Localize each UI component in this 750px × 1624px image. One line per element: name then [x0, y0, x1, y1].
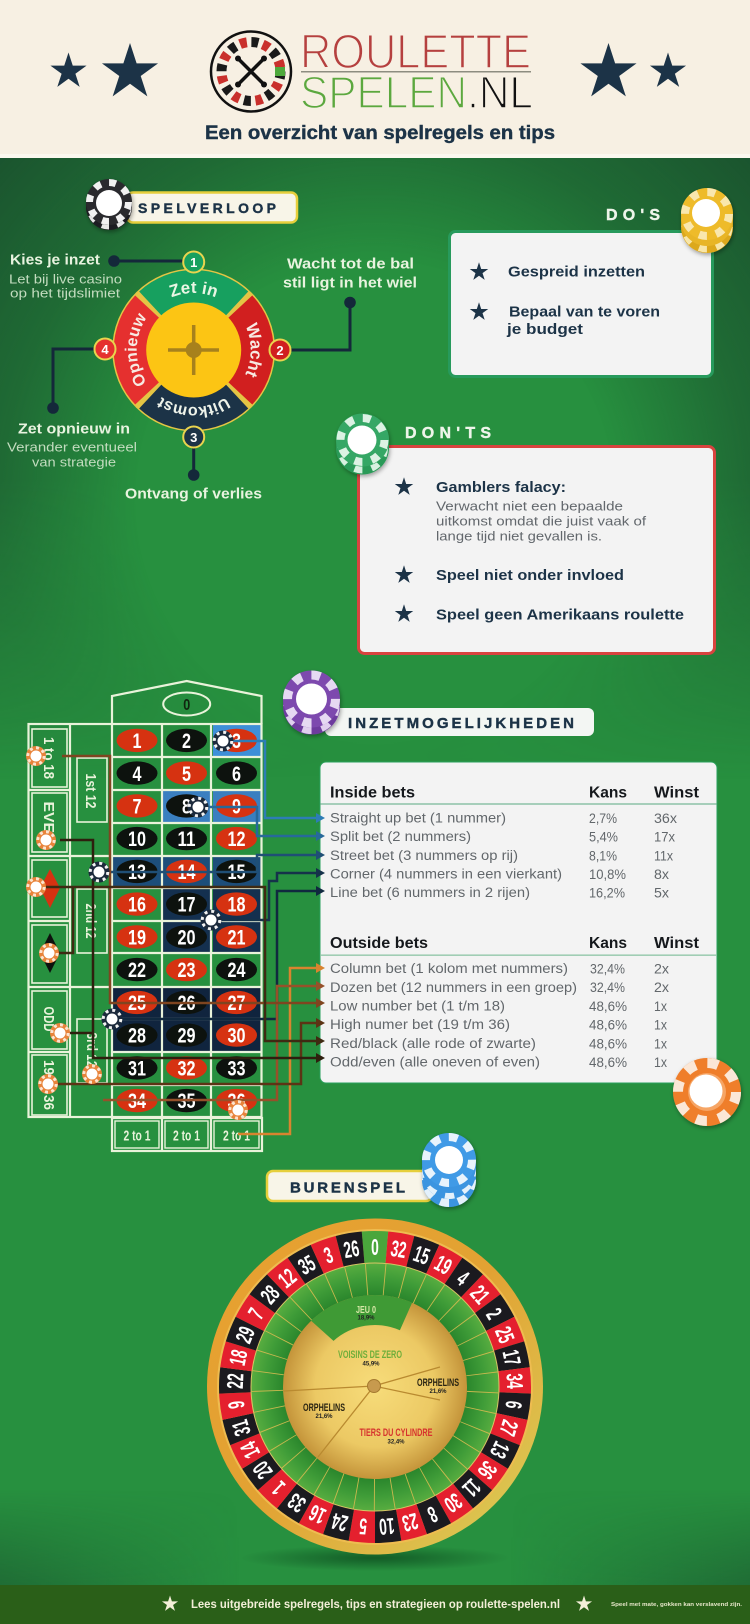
- zero section: 0: [183, 697, 190, 714]
- outside bets table: High numer bet (19 t/m 36): [330, 1017, 510, 1032]
- inside bets table: Kans: [589, 784, 627, 802]
- inside bets table: Split bet (2 nummers): [330, 829, 471, 844]
- number cells: 14: [178, 861, 196, 884]
- number cells: 10: [128, 828, 146, 851]
- chip: orange: [673, 1058, 741, 1126]
- inside bets table: Corner (4 nummers in een vierkant): [330, 866, 562, 882]
- number pockets: 17: [496, 1348, 525, 1368]
- item: bepaal budget: Bepaal van te voren: [509, 304, 660, 320]
- chip: dark: [86, 179, 132, 230]
- number pockets: 32: [389, 1236, 408, 1264]
- item: speel niet onder invloed: [395, 565, 624, 584]
- number cells: 1: [132, 730, 142, 753]
- outside bets table: 48,6%: [589, 1036, 627, 1052]
- number pockets: 30: [439, 1487, 466, 1517]
- number pockets: 35: [294, 1251, 321, 1281]
- number pockets: 25: [489, 1323, 518, 1347]
- don'ts card: [358, 446, 714, 654]
- table chips: orange: [26, 746, 248, 1120]
- number pockets: 9: [224, 1399, 251, 1410]
- chip: blue stack: [422, 1133, 476, 1207]
- number cells: 23: [178, 959, 196, 982]
- number cells: 24: [228, 959, 246, 982]
- number cells: 20: [178, 926, 196, 950]
- number cells: 28: [128, 1024, 146, 1048]
- number pockets: 27: [493, 1417, 522, 1439]
- text: kies je inzet: [9, 252, 122, 300]
- number pockets: 11: [457, 1473, 485, 1502]
- number cells: 25: [128, 992, 146, 1015]
- outside bet labels: 19 to 36: [40, 1060, 57, 1110]
- number cells: 21: [228, 926, 246, 950]
- section: burenspel: [207, 1133, 543, 1571]
- number pockets: 22: [223, 1373, 250, 1389]
- zero section: [112, 681, 262, 724]
- label: orphelins right: ORPHELINS: [417, 1377, 459, 1389]
- subtitle: Een overzicht van spelregels en tips: [205, 123, 555, 144]
- number cells: 17: [178, 894, 196, 916]
- number cells: 36: [228, 1090, 246, 1113]
- table card: [320, 762, 717, 1083]
- bet connector lines: [36, 741, 325, 1134]
- number pockets: 3: [321, 1243, 337, 1270]
- text: zet opnieuw in: [7, 420, 137, 470]
- panel: inzetmogelijkheden table: [320, 762, 717, 1083]
- 2 to 1 cells: 2 to 1: [173, 1128, 200, 1144]
- arrow: red black: [36, 887, 325, 1046]
- connector step 3: [188, 448, 200, 481]
- number pockets: 29: [232, 1323, 261, 1347]
- number cells: 33: [228, 1058, 246, 1080]
- number pockets: [219, 1231, 531, 1544]
- inside bets table: Inside bets: [330, 784, 415, 802]
- banner: inzetmogelijkheden: INZETMOGELIJKHEDEN: [348, 715, 574, 732]
- number pockets: 36: [472, 1456, 501, 1483]
- highlighted cells: [113, 725, 261, 1052]
- outside bets table: Column bet (1 kolom met nummers): [330, 961, 568, 976]
- logo text: roulette: ROULETTE: [300, 26, 531, 79]
- inside bets table: 2,7%: [589, 811, 617, 826]
- 2 to 1 cells: 2 to 1: [223, 1128, 250, 1144]
- number cells: 35: [178, 1090, 196, 1113]
- roulette betting table: [28, 681, 262, 1151]
- number pockets: 0: [371, 1236, 379, 1261]
- arrow: column: [238, 963, 325, 1134]
- item: gespreid inzetten: Gespreid inzetten: [508, 264, 645, 280]
- footer text: Lees uitgebreide spelregels, tips en strategieen op roulette-spelen.nl: [191, 1599, 560, 1611]
- logo text: spelen.nl: SPELEN.NL: [300, 67, 533, 118]
- number pockets: 13: [484, 1437, 514, 1462]
- number pockets: 19: [430, 1251, 456, 1281]
- section: spelverloop: [7, 179, 417, 502]
- roulette wheel: [207, 1218, 543, 1554]
- number pockets: 8: [423, 1500, 441, 1527]
- number badge 4: 4: [101, 342, 109, 357]
- inside bets table: 36x: [654, 811, 677, 826]
- label: jeu 0: JEU 0: [356, 1305, 376, 1316]
- text: kies je inzet: Kies je inzet: [10, 252, 100, 268]
- number cells: 11: [178, 828, 196, 851]
- gold rim: [207, 1218, 543, 1554]
- connector step 1: [108, 255, 183, 267]
- icon: red diamond: [40, 869, 60, 908]
- number pockets: 7: [244, 1304, 270, 1324]
- number pockets: 14: [236, 1437, 266, 1462]
- number cells: 9: [232, 796, 241, 818]
- number badge 1: 1: [190, 255, 197, 270]
- number cells: 3: [232, 730, 241, 753]
- label: orphelins left: [303, 1402, 345, 1420]
- connector step 4: [47, 349, 94, 414]
- star: header left large: [102, 43, 158, 96]
- number cells: 7: [132, 796, 142, 818]
- outside bet labels: ODD: [40, 1006, 57, 1032]
- outside bet boxes: [32, 729, 107, 1115]
- number badge 2: [270, 340, 290, 360]
- item: bepaal budget: [470, 302, 660, 338]
- text: kies je inzet: op het tijdslimiet: [10, 286, 120, 300]
- outside bet labels: 3rd 12: [83, 1032, 100, 1068]
- do's card: [450, 232, 712, 376]
- arrow: straight up: [223, 741, 325, 823]
- star: header right large: [580, 43, 637, 96]
- number pockets: 21: [464, 1281, 494, 1310]
- number pockets: 12: [274, 1264, 302, 1294]
- arrow: dozen: [103, 981, 325, 1100]
- label: jeu 0: 18,9%: [357, 1316, 375, 1322]
- number cells: 29: [178, 1024, 196, 1048]
- chip: purple: [283, 670, 340, 734]
- jeu 0 wedge: [311, 1295, 412, 1341]
- number cells: 19: [128, 926, 146, 950]
- heading: don'ts: DON'TS: [405, 425, 491, 442]
- banner: spelverloop: SPELVERLOOP: [138, 200, 276, 216]
- item: gamblers falacy: uitkomst omdat die juist vaak of: [436, 514, 646, 528]
- number badge 1: [183, 252, 204, 272]
- text: ontvang of verlies: Ontvang of verlies: [125, 486, 262, 502]
- outside bets table: 48,6%: [589, 1055, 627, 1070]
- inside bets table: 8x: [654, 867, 669, 882]
- number badge 4: [94, 338, 116, 360]
- outside bets table: 2x: [654, 980, 669, 995]
- outside bets table: [320, 935, 717, 1070]
- process wheel: Uitkomst: [157, 397, 230, 418]
- item: gespreid inzetten: [470, 262, 645, 280]
- outside bets table: 1x: [654, 999, 667, 1014]
- outside bet labels: [40, 737, 100, 1110]
- inside bets table: [320, 784, 717, 900]
- item: gamblers falacy: Verwacht niet een bepaalde: [436, 498, 623, 514]
- grid lines: [28, 724, 262, 1117]
- wheel shadow: [240, 1545, 510, 1571]
- label: tiers du cylindre: 32,4%: [387, 1440, 405, 1446]
- process wheel: Opnieuw: [124, 312, 146, 386]
- text: wacht tot de bal: [283, 256, 417, 292]
- label: orphelins right: 21,6%: [429, 1389, 447, 1395]
- outside bets table: 2x: [654, 962, 669, 976]
- item: geen amerikaans roulette: [395, 604, 684, 624]
- logo divider: [301, 71, 531, 72]
- header band: [0, 0, 750, 158]
- footer: [0, 1585, 750, 1624]
- panel: don'ts: [336, 414, 714, 654]
- number pockets: 26: [342, 1236, 361, 1264]
- number pockets: 24: [329, 1507, 351, 1535]
- label: jeu 0: [356, 1305, 376, 1322]
- outside bets table: Outside bets: [330, 935, 428, 952]
- number cells: 32: [178, 1058, 196, 1080]
- green pocket band: [251, 1263, 499, 1511]
- item: speel niet onder invloed: Speel niet onder invloed: [436, 567, 624, 584]
- text: zet opnieuw in: Zet opnieuw in: [18, 420, 130, 438]
- number cells: 31: [128, 1058, 146, 1080]
- banner: spelverloop: [127, 192, 297, 222]
- text: wacht tot de bal: Wacht tot de bal: [287, 256, 414, 272]
- label: voisins de zero: 45,9%: [362, 1362, 380, 1368]
- number pockets: 28: [256, 1281, 286, 1310]
- number pockets: 23: [399, 1507, 421, 1535]
- inside bets table: Straight up bet (1 nummer): [330, 810, 506, 826]
- number pockets: 20: [249, 1456, 278, 1483]
- outside bets table: 32,4%: [590, 980, 625, 995]
- hub: [368, 1380, 380, 1392]
- table chips: dark: [88, 730, 234, 1030]
- inside bets table: 8,1%: [589, 848, 617, 864]
- outside bets table: Winst: [654, 935, 699, 952]
- number cells: 18: [228, 894, 246, 916]
- 2 to 1 cells: [112, 1118, 262, 1151]
- number cells: 6: [232, 763, 241, 786]
- text: wacht tot de bal: stil ligt in het wiel: [283, 274, 417, 292]
- number pockets: 1: [267, 1475, 291, 1499]
- number pockets: 15: [410, 1242, 433, 1271]
- number pockets: 6: [499, 1399, 526, 1410]
- number pockets: 33: [284, 1487, 311, 1517]
- outside bet labels: 2nd 12: [82, 904, 99, 938]
- chip: green: [336, 414, 389, 474]
- outside bets table: Red/black (alle rode of zwarte): [330, 1036, 536, 1051]
- outside bets table: 48,6%: [589, 999, 627, 1014]
- inside bets table: Line bet (6 nummers in 2 rijen): [330, 885, 530, 900]
- number cells: [116, 729, 257, 1113]
- number cells: 16: [128, 894, 146, 916]
- inside bets table: 5,4%: [589, 830, 618, 844]
- number cells: 13: [128, 861, 146, 884]
- outside bets table: 1x: [654, 1018, 667, 1032]
- number cells: 2: [182, 730, 191, 753]
- number cells: 27: [228, 992, 246, 1015]
- inside bets table: 17x: [654, 830, 675, 844]
- outside bet labels: 1st 12: [82, 774, 99, 808]
- inside bets table: 16,2%: [589, 886, 625, 900]
- number pockets: 4: [451, 1267, 473, 1292]
- process wheel: Wacht: [245, 322, 262, 378]
- number badge 3: 3: [190, 430, 197, 445]
- banner: burenspel: BURENSPEL: [290, 1180, 405, 1196]
- number pockets: 34: [500, 1373, 527, 1390]
- inside bets table: Street bet (3 nummers op rij): [330, 848, 518, 863]
- outside bets table: Low number bet (1 t/m 18): [330, 998, 505, 1014]
- label: tiers du cylindre: TIERS DU CYLINDRE: [360, 1427, 432, 1439]
- star: header left small: [50, 52, 87, 87]
- outside bets table: 48,6%: [589, 1018, 627, 1032]
- number cells: 4: [132, 763, 142, 786]
- number cells: 26: [178, 992, 196, 1015]
- text: zet opnieuw in: Verander eventueel: [7, 440, 137, 454]
- text: kies je inzet: Let bij live casino: [9, 272, 122, 286]
- outside bets table: 1x: [654, 1036, 667, 1052]
- number badge 2: 2: [276, 343, 284, 358]
- text: zet opnieuw in: van strategie: [32, 454, 116, 470]
- number pockets: 31: [228, 1416, 257, 1439]
- number cells: 5: [182, 763, 191, 786]
- number cells: 8: [182, 796, 191, 818]
- inside bets table: 11x: [654, 848, 673, 864]
- banner: inzetmogelijkheden: [325, 708, 594, 736]
- outside bets table: Dozen bet (12 nummers in een groep): [330, 980, 577, 995]
- star: header right small: [650, 52, 686, 87]
- inside bets table: 10,8%: [589, 867, 626, 882]
- sector lines: [284, 1367, 440, 1457]
- process wheel: [112, 269, 274, 431]
- arrow: high number: [48, 1018, 325, 1084]
- icon: black diamond: [40, 933, 60, 973]
- chip: yellow: [681, 188, 733, 253]
- number cells: 22: [128, 959, 146, 982]
- arrow: low number: [62, 756, 325, 1008]
- process wheel: Zet in: [169, 282, 217, 298]
- arrow: corner: [211, 868, 325, 920]
- outside bets table: 32,4%: [590, 962, 625, 976]
- item: gamblers falacy: Gamblers falacy:: [436, 479, 566, 496]
- item: gamblers falacy: lange tijd niet gevallen is.: [436, 528, 602, 544]
- gold centre disc: [283, 1295, 467, 1479]
- outside bets table: Kans: [589, 935, 627, 952]
- footer disclaimer: Speel met mate, gokken kan verslavend zijn.: [611, 1602, 743, 1608]
- outside bets table: 1x: [654, 1055, 667, 1070]
- star: footer right: [576, 1596, 592, 1611]
- label: orphelins left: ORPHELINS: [303, 1402, 345, 1414]
- arrow: line bet: [112, 886, 325, 1019]
- number pockets: 5: [358, 1512, 368, 1538]
- star: footer left: [162, 1596, 178, 1611]
- heading: do's: DO'S: [606, 207, 660, 224]
- connector step 2: [291, 297, 356, 350]
- arrow: split: [198, 807, 325, 841]
- item: gamblers falacy: [395, 477, 646, 544]
- inside bets table: 5x: [654, 886, 669, 900]
- item: bepaal budget: je budget: [506, 321, 583, 338]
- logo wheel icon: [211, 32, 291, 112]
- number pockets: 18: [225, 1348, 254, 1368]
- label: voisins de zero: VOISINS DE ZERO: [338, 1349, 402, 1361]
- outside bet labels: 1 to 18: [40, 737, 57, 779]
- outside bets table: Odd/even (alle oneven of even): [330, 1054, 540, 1070]
- number cells: 15: [228, 861, 246, 884]
- arrow: street: [99, 850, 325, 872]
- number pockets: 2: [480, 1304, 506, 1324]
- label: tiers du cylindre: [360, 1427, 432, 1446]
- banner: burenspel: [267, 1171, 432, 1201]
- number pockets: 16: [306, 1499, 330, 1528]
- outside bet labels: EVEN: [40, 802, 57, 844]
- number cells: 30: [228, 1024, 246, 1048]
- inside bets table: Winst: [654, 784, 699, 802]
- number cells: 34: [128, 1090, 146, 1113]
- arrow: odd even: [60, 840, 325, 1063]
- 2 to 1 cells: 2 to 1: [124, 1128, 150, 1144]
- label: voisins de zero: [338, 1349, 402, 1368]
- panel: do's: [450, 188, 733, 376]
- label: orphelins right: [417, 1377, 459, 1395]
- item: geen amerikaans roulette: Speel geen Amerikaans roulette: [436, 606, 684, 624]
- number badge 3: [183, 426, 204, 448]
- number cells: 12: [228, 828, 246, 851]
- number pockets: 10: [378, 1512, 395, 1539]
- label: orphelins left: 21,6%: [315, 1414, 333, 1420]
